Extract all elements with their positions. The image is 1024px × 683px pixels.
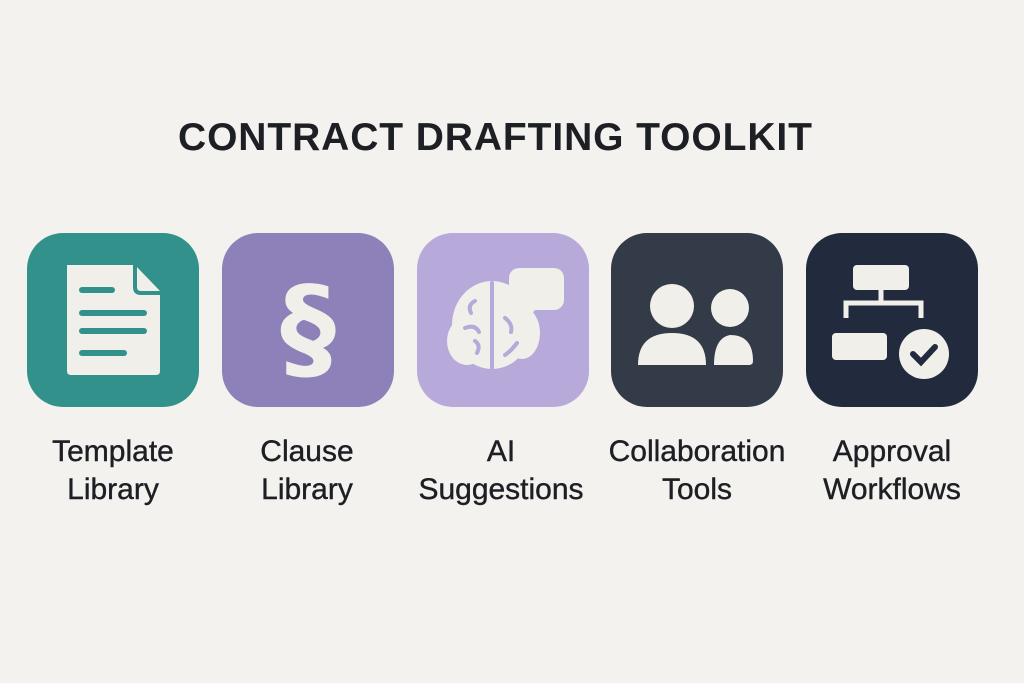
tile: collaboration tools	[611, 233, 783, 407]
icon: document	[67, 265, 160, 375]
title: CONTRACT DRAFTING TOOLKIT	[178, 116, 813, 159]
label: template library	[52, 435, 174, 506]
icon: two people	[638, 284, 753, 365]
tile: template library	[27, 233, 199, 407]
tile: approval workflows	[806, 233, 978, 407]
icon: brain with speech bubble	[447, 268, 564, 369]
label: collaboration tools: Tools	[662, 473, 732, 506]
icon: section sign: §	[280, 264, 336, 394]
label: approval workflows: Approval	[833, 435, 951, 468]
label: clause library	[260, 435, 354, 506]
label: template library: Template	[52, 435, 174, 468]
label: collaboration tools	[609, 435, 785, 506]
tile: clause library	[222, 233, 394, 407]
label: ai suggestions: AI	[487, 435, 515, 468]
label: ai suggestions	[418, 435, 584, 506]
label: clause library: Library	[261, 473, 353, 506]
tile: ai suggestions	[417, 233, 589, 407]
label: ai suggestions: Suggestions	[418, 473, 584, 506]
label: template library: Library	[67, 473, 159, 506]
label: collaboration tools: Collaboration	[609, 435, 785, 468]
label: clause library: Clause	[260, 435, 354, 468]
icon: workflow with check	[832, 265, 949, 379]
label: approval workflows: Workflows	[823, 473, 961, 506]
label: approval workflows	[823, 435, 961, 506]
